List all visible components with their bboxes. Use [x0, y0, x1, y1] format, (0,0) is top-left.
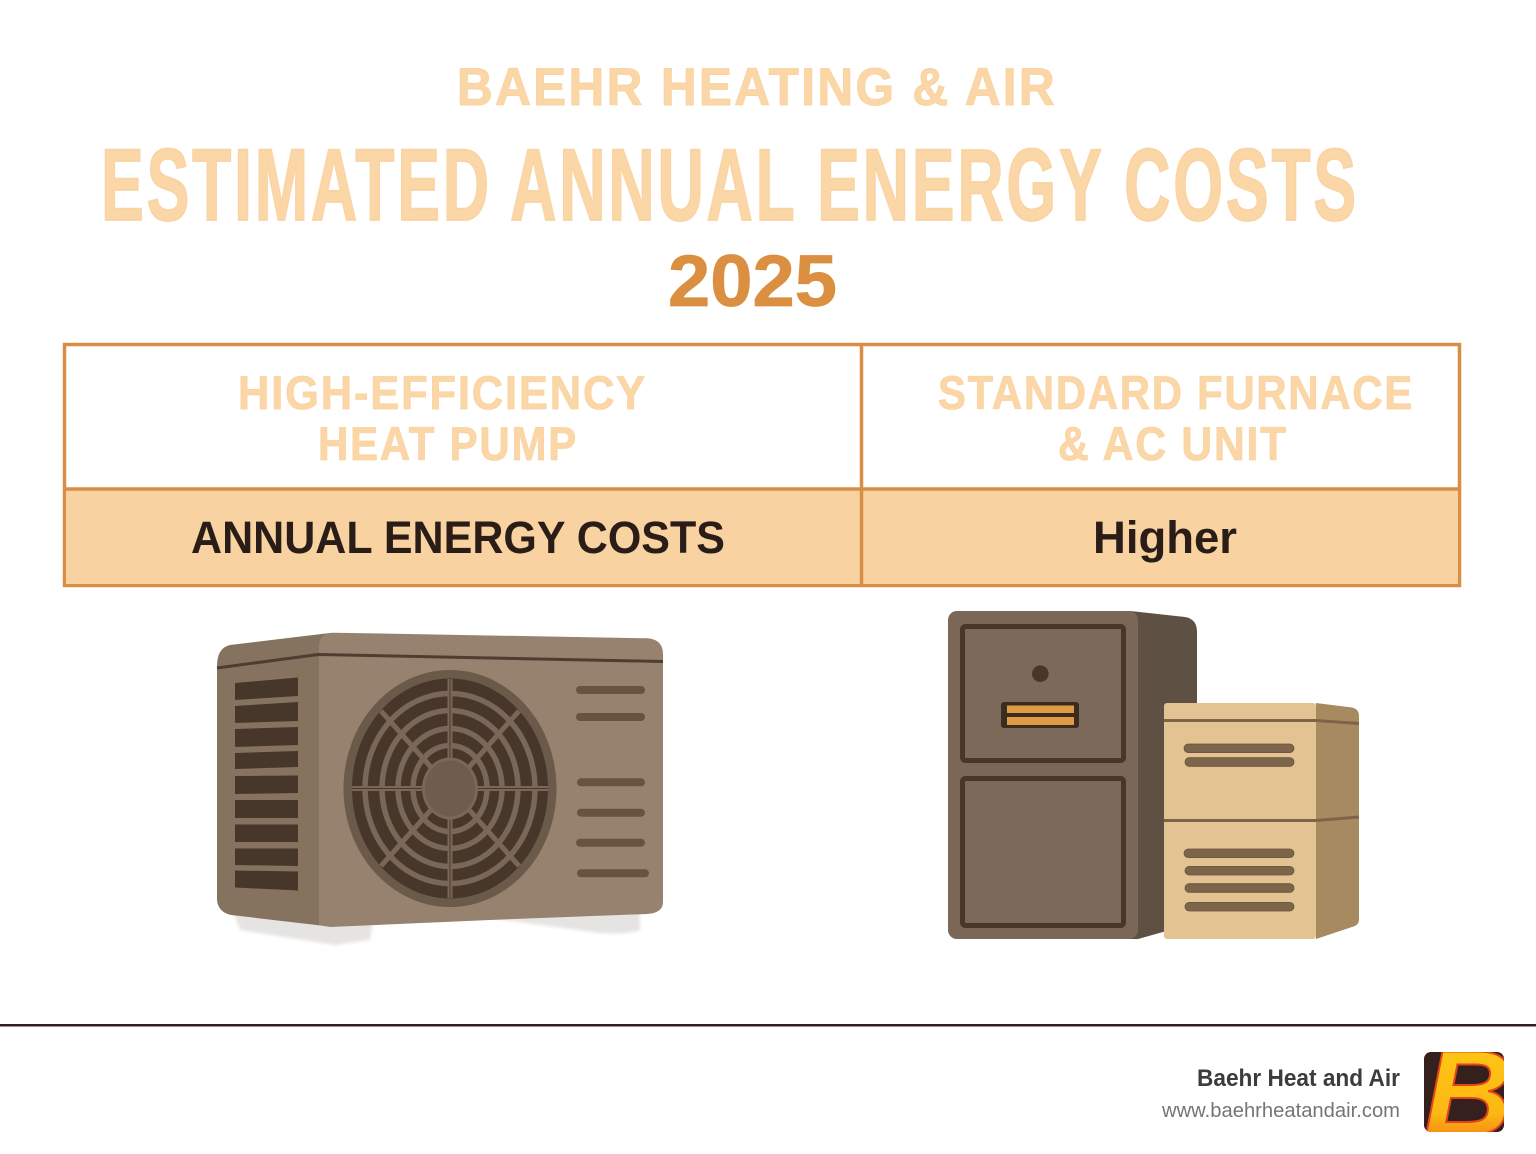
- brand heading: BAEHR HEATING & AIR: [457, 58, 1057, 117]
- column heading: high-efficiency heat pump: [238, 366, 647, 470]
- unit feet shadow: [234, 912, 640, 945]
- table row: annual energy costs background: [66, 490, 1458, 584]
- furnace side face: [1130, 611, 1197, 939]
- column heading: high-efficiency heat pump: HEAT PUMP: [318, 417, 578, 470]
- ac cabinet front: [1164, 703, 1316, 939]
- ac cabinet vents: [1184, 744, 1294, 911]
- column heading: standard furnace and ac unit: STANDARD FURNACE: [938, 366, 1414, 419]
- unit side face: [217, 633, 332, 926]
- upper furnace panel: [962, 626, 1124, 760]
- year: 2025: [668, 241, 837, 322]
- ac cabinet seams: [1164, 720, 1359, 820]
- furnace front face: [948, 611, 1138, 939]
- top seam: [217, 654, 663, 668]
- fan grille: [344, 670, 556, 907]
- footer divider: [0, 1024, 1536, 1026]
- front vents: [576, 686, 649, 877]
- ac cabinet side: [1316, 703, 1359, 939]
- furnace indicator dot: [1032, 665, 1049, 682]
- lower furnace panel: [962, 778, 1124, 926]
- logo: [1424, 1052, 1504, 1132]
- column heading: standard furnace and ac unit: [938, 366, 1414, 470]
- icon: heat pump outdoor unit: [217, 633, 663, 945]
- footer website: www.baehrheatandair.com: [1161, 1099, 1400, 1122]
- column heading: standard furnace and ac unit: & AC UNIT: [1058, 417, 1288, 470]
- unit front face: [319, 633, 663, 927]
- comparison table: [64, 344, 1460, 586]
- row value: Higher: [1093, 512, 1237, 563]
- row label: ANNUAL ENERGY COSTS: [191, 512, 725, 563]
- furnace handle: [1001, 702, 1079, 728]
- icon: standard furnace and ac unit: [948, 611, 1359, 939]
- side louvers: [235, 678, 298, 890]
- footer company name: Baehr Heat and Air: [1197, 1065, 1400, 1092]
- column heading: high-efficiency heat pump: HIGH-EFFICIENCY: [238, 366, 647, 419]
